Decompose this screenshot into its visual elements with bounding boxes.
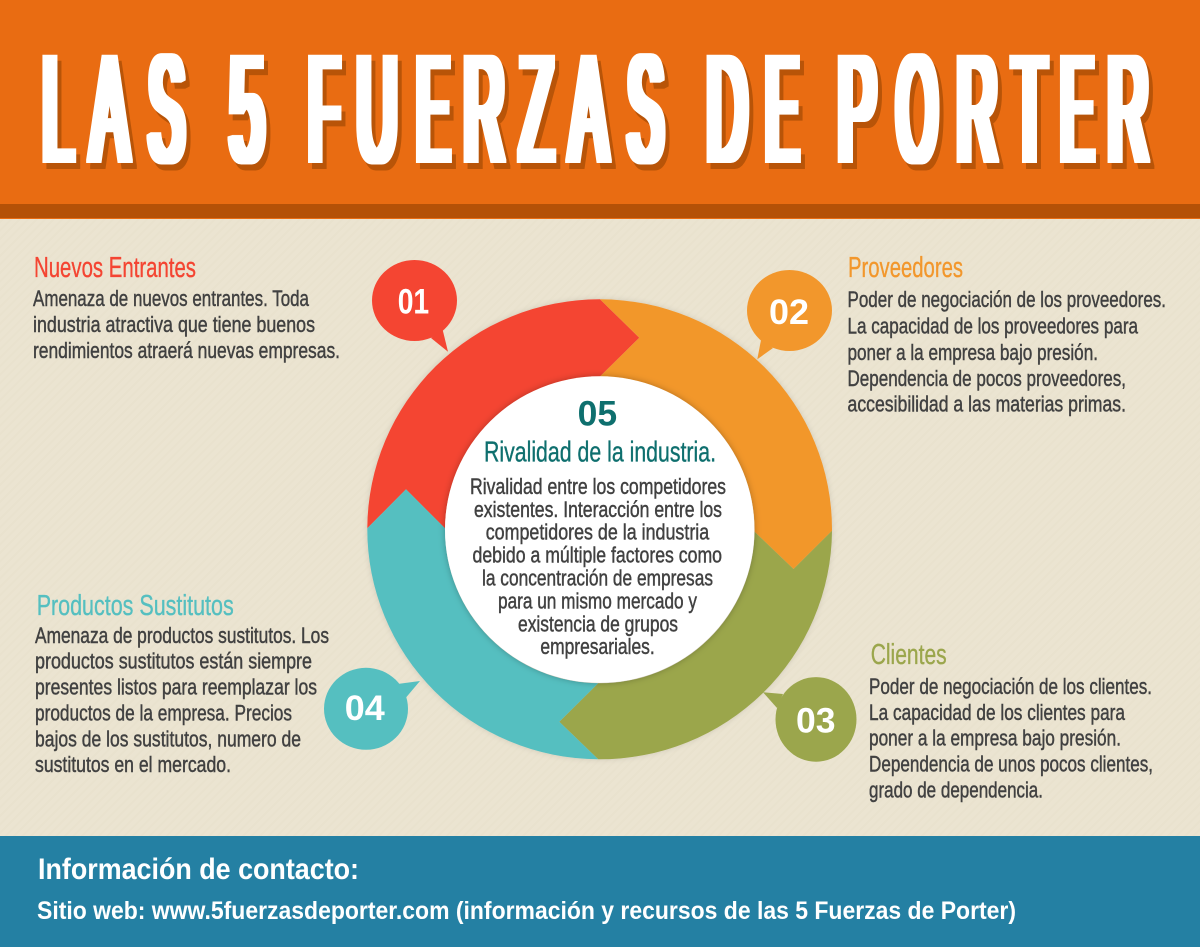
- title: S: [628, 24, 663, 194]
- title: R: [957, 24, 997, 194]
- center body text: la concentración de empresas: [482, 566, 713, 590]
- heading: Rivalidad de la industria: Rivalidad de la industria.: [484, 437, 716, 469]
- ring segment 02 orange arrow: [600, 299, 832, 569]
- panel: Nuevos Entrantes: [33, 252, 340, 363]
- center white circle: [445, 376, 754, 683]
- body: Nuevos Entrantes: Amenaza de nuevos entrantes. Toda: [33, 286, 309, 311]
- title: T: [1013, 24, 1046, 194]
- body: Productos Sustitutos: productos sustitutos están siempre: [35, 648, 312, 674]
- heading: Clientes: Clientes: [871, 639, 947, 671]
- body: Clientes: [869, 674, 1153, 802]
- center body text: competidores de la industria: [486, 520, 710, 544]
- body: Productos Sustitutos: Amenaza de productos sustitutos. Los: [35, 623, 329, 648]
- title: A: [91, 24, 128, 194]
- body: Productos Sustitutos: bajos de los sustitutos, numero de: [35, 726, 301, 752]
- title: E: [1061, 24, 1093, 194]
- title: L: [43, 24, 73, 194]
- title: D: [707, 24, 747, 194]
- center body text: existentes. Interacción entre los: [474, 497, 722, 522]
- body: Clientes: grado de dependencia.: [869, 777, 1043, 802]
- title: P: [838, 24, 876, 194]
- heading: Nuevos Entrantes: Nuevos Entrantes: [34, 252, 196, 284]
- footer panel: [0, 836, 1200, 947]
- ring segment 01 red arrow: [367, 299, 639, 528]
- center body text: para un mismo mercado y: [498, 588, 698, 613]
- ring segment 04 teal arrow: [367, 489, 598, 759]
- title: F: [309, 24, 339, 194]
- title: Z: [520, 24, 553, 194]
- number 05: 05: [578, 395, 617, 434]
- title: [43, 24, 1148, 194]
- badge 04: 04: [345, 689, 385, 728]
- panel: Productos Sustitutos: [35, 590, 329, 777]
- ring segment 03 olive arrow: [559, 531, 832, 759]
- body: Proveedores: accesibilidad a las materias primas.: [848, 392, 1126, 417]
- center body text: existencia de grupos: [518, 611, 678, 636]
- panel: Proveedores: [848, 252, 1166, 417]
- body: Clientes: poner a la empresa bajo presión.: [869, 726, 1121, 751]
- circular diagram: [367, 299, 832, 759]
- badge 01: [372, 260, 457, 352]
- heading: Proveedores: Proveedores: [848, 252, 963, 284]
- badge 02: 02: [769, 293, 809, 332]
- header banner: [0, 0, 1200, 219]
- footer heading: Información de contacto:: [38, 853, 359, 886]
- body: Productos Sustitutos: sustitutos en el mercado.: [35, 752, 231, 777]
- body: Nuevos Entrantes: industria atractiva que tiene buenos: [33, 312, 315, 337]
- badge 03: [763, 677, 856, 762]
- center body text: debido a múltiple factores como: [472, 542, 722, 567]
- title: S: [149, 24, 184, 194]
- title: E: [417, 24, 449, 194]
- body: Productos Sustitutos: presentes listos para reemplazar los: [35, 674, 317, 699]
- center body text: [470, 474, 726, 659]
- body: Productos Sustitutos: productos de la empresa. Precios: [35, 701, 292, 726]
- footer website line: Sitio web: www.5fuerzasdeporter.com (información y recursos de las 5 Fuerzas de Porter): [37, 897, 1016, 925]
- title: E: [766, 24, 798, 194]
- body: Proveedores: [848, 287, 1166, 417]
- center body text: empresariales.: [540, 634, 655, 659]
- body: Nuevos Entrantes: rendimientos atraerá nuevas empresas.: [33, 338, 340, 363]
- center content: force 05: [470, 395, 726, 659]
- body: Proveedores: poner a la empresa bajo presión.: [848, 340, 1098, 365]
- title: R: [464, 24, 504, 194]
- badge 01: 01: [398, 282, 429, 321]
- ring of arrows: [367, 299, 832, 759]
- heading: Productos Sustitutos: Productos Sustitutos: [37, 590, 234, 622]
- body: Productos Sustitutos: [35, 623, 329, 777]
- badge 02: [747, 270, 832, 359]
- badge 04: [324, 668, 420, 750]
- badge 03: 03: [796, 701, 836, 740]
- title: O: [897, 24, 937, 194]
- title: A: [570, 24, 607, 194]
- title: U: [357, 24, 397, 194]
- title: 5: [230, 24, 264, 194]
- center body text: Rivalidad entre los competidores: [470, 474, 726, 499]
- body: Clientes: La capacidad de los clientes para: [869, 700, 1125, 725]
- body: Nuevos Entrantes: [33, 286, 340, 363]
- panel: Clientes: [869, 639, 1153, 802]
